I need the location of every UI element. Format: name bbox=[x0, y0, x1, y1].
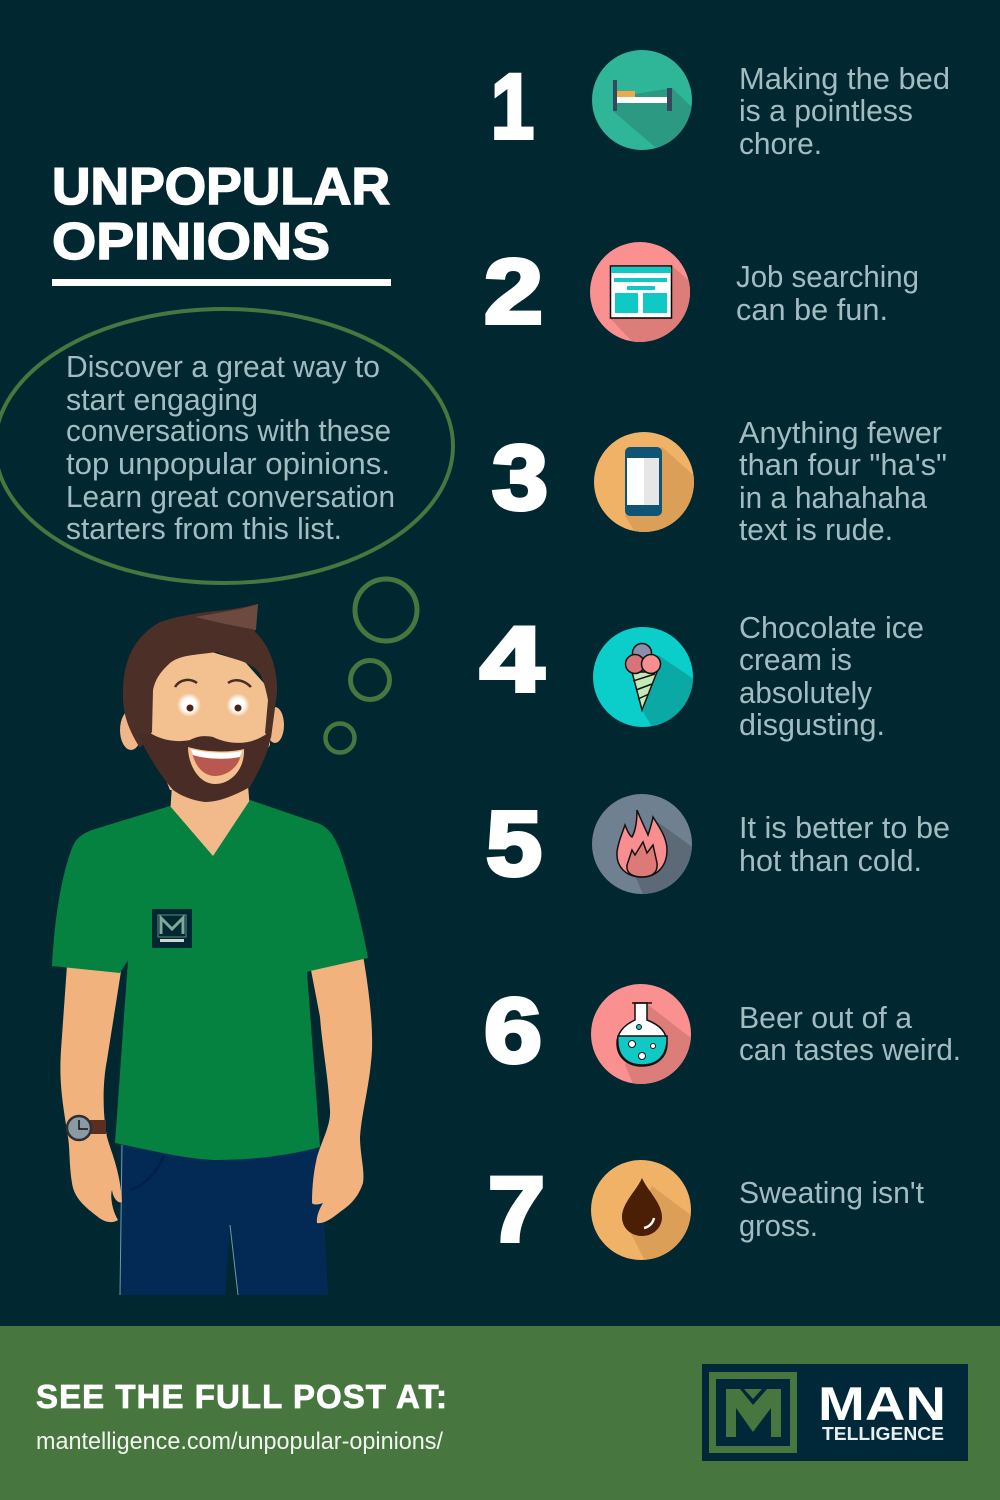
logo: TELLIGENCE bbox=[822, 1424, 944, 1444]
thought bubble bbox=[0, 309, 453, 752]
number 7: 7 bbox=[488, 1159, 545, 1261]
call to action: SEE THE FULL POST AT: bbox=[36, 1378, 447, 1415]
text 4: absolutely bbox=[739, 675, 872, 710]
intro text: starters from this list. bbox=[66, 511, 342, 546]
icon: drop bbox=[591, 1160, 691, 1260]
text 3: Anything fewer bbox=[739, 415, 942, 450]
text 3 bbox=[739, 415, 947, 547]
number 4: 4 bbox=[480, 609, 544, 711]
text 6: Beer out of a bbox=[739, 1000, 913, 1035]
text 3: in a hahahaha bbox=[739, 480, 928, 515]
number 2: 2 bbox=[484, 241, 543, 343]
title: UNPOPULAR bbox=[52, 158, 390, 216]
number 6: 6 bbox=[484, 980, 542, 1082]
intro text: top unpopular opinions. bbox=[66, 446, 390, 481]
neck bbox=[170, 785, 250, 858]
face bbox=[150, 650, 270, 790]
hair bbox=[123, 604, 277, 748]
title: OPINIONS bbox=[52, 213, 330, 271]
text 4: disgusting. bbox=[739, 707, 885, 742]
intro text: Discover a great way to bbox=[66, 349, 380, 384]
text 2: can be fun. bbox=[736, 292, 888, 327]
icon: bed bbox=[592, 50, 692, 150]
intro text bbox=[66, 349, 395, 546]
text 3: text is rude. bbox=[739, 512, 893, 547]
footer band bbox=[0, 1326, 1000, 1500]
intro text: Learn great conversation bbox=[66, 479, 395, 514]
icon: browser window bbox=[590, 242, 690, 342]
number 5: 5 bbox=[486, 793, 542, 895]
text 1 bbox=[739, 61, 950, 161]
text 2 bbox=[736, 259, 919, 327]
text 4: cream is bbox=[739, 642, 852, 677]
beard bbox=[138, 728, 272, 802]
eyes bbox=[175, 680, 251, 717]
text 4: Chocolate ice bbox=[739, 610, 924, 645]
text 1: is a pointless bbox=[739, 93, 913, 128]
text 7 bbox=[739, 1175, 924, 1243]
text 6 bbox=[739, 1000, 961, 1067]
mouth bbox=[188, 747, 244, 784]
url: mantelligence.com/unpopular-opinions/ bbox=[36, 1428, 443, 1455]
title bbox=[52, 158, 391, 286]
intro text: start engaging bbox=[66, 382, 258, 417]
icon: phone bbox=[594, 432, 694, 532]
item 6 bbox=[486, 984, 958, 1084]
text 3: than four "ha's" bbox=[739, 447, 947, 482]
item 2 bbox=[484, 241, 919, 350]
text 5: It is better to be bbox=[739, 810, 950, 845]
item 5 bbox=[486, 794, 949, 894]
icon: flame bbox=[592, 794, 692, 894]
item 1 bbox=[491, 50, 950, 161]
text 1: chore. bbox=[739, 126, 822, 161]
ears bbox=[120, 707, 284, 750]
text 7: Sweating isn't bbox=[739, 1175, 924, 1210]
arms bbox=[60, 955, 372, 1223]
text 2: Job searching bbox=[736, 259, 919, 294]
icon: ice cream bbox=[593, 627, 693, 727]
number 1: 1 bbox=[491, 56, 534, 158]
text 6: can tastes weird. bbox=[739, 1032, 961, 1067]
text 4 bbox=[739, 610, 924, 742]
logo bbox=[702, 1364, 968, 1461]
text 5 bbox=[739, 810, 950, 878]
item 3 bbox=[492, 415, 947, 547]
logo: MAN bbox=[818, 1377, 946, 1430]
number 3: 3 bbox=[492, 427, 548, 529]
watch bbox=[67, 1116, 106, 1140]
item 7 bbox=[490, 1160, 924, 1260]
text 5: hot than cold. bbox=[739, 843, 922, 878]
pants bbox=[120, 1140, 328, 1295]
shirt badge bbox=[152, 909, 192, 948]
text 1: Making the bed bbox=[739, 61, 950, 96]
shirt bbox=[52, 800, 368, 1160]
icon: flask bbox=[591, 984, 691, 1084]
character: bearded man in green shirt bbox=[52, 604, 372, 1295]
intro text: conversations with these bbox=[66, 413, 391, 448]
item 4 bbox=[480, 609, 924, 742]
text 7: gross. bbox=[739, 1208, 818, 1243]
